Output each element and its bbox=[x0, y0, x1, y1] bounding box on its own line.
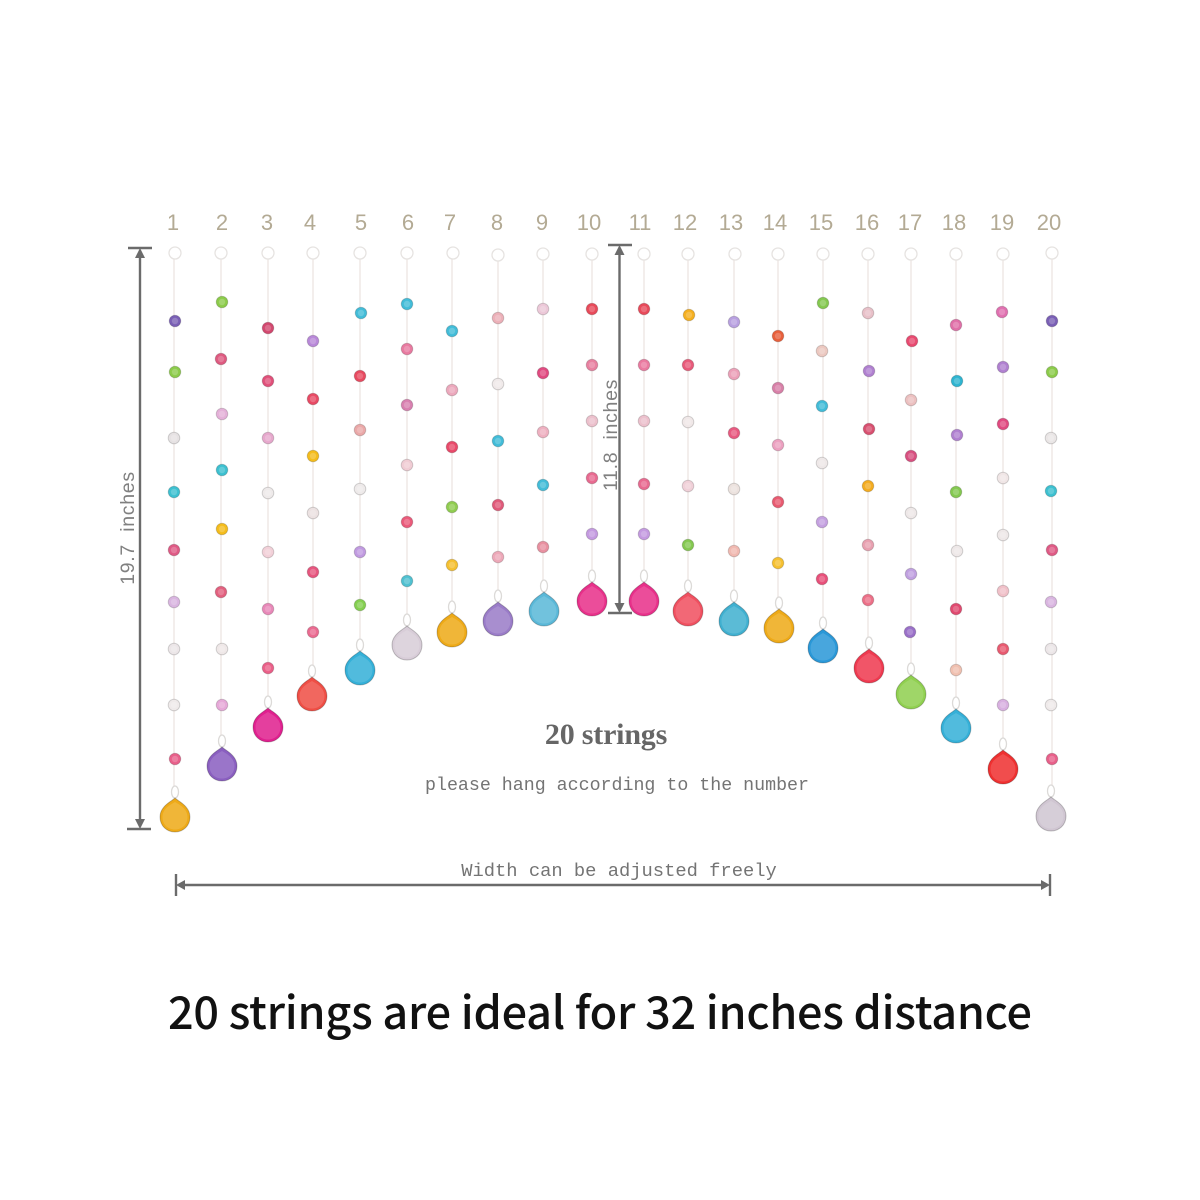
string 18 bbox=[941, 210, 971, 743]
drop: green bbox=[896, 663, 926, 709]
number 4: 4 bbox=[304, 210, 316, 235]
label: 19.7 inches: 19.7 inches bbox=[117, 471, 139, 585]
drop: red bbox=[854, 637, 884, 683]
number 3: 3 bbox=[261, 210, 273, 235]
drop: pink bbox=[577, 570, 607, 616]
number 17: 17 bbox=[898, 210, 922, 235]
arrow: width bbox=[176, 874, 1050, 896]
drop: coral red bbox=[673, 580, 703, 626]
number 14: 14 bbox=[763, 210, 787, 235]
label: width adjustable: Width can be adjusted freely bbox=[461, 860, 777, 882]
number 12: 12 bbox=[673, 210, 697, 235]
arrow: height 19.7 inches bbox=[127, 248, 152, 829]
string 19 bbox=[988, 210, 1018, 784]
drop: purple bbox=[483, 590, 513, 636]
number 9: 9 bbox=[536, 210, 548, 235]
drop: blue bbox=[941, 697, 971, 743]
caption: 20 strings are ideal for 32 inches distance bbox=[168, 977, 1032, 1042]
note: hang according to number: please hang according to the number bbox=[425, 776, 809, 796]
string 20 bbox=[1036, 210, 1066, 831]
number 5: 5 bbox=[355, 210, 367, 235]
number 8: 8 bbox=[491, 210, 503, 235]
number 15: 15 bbox=[809, 210, 833, 235]
number 18: 18 bbox=[942, 210, 966, 235]
string 4 bbox=[297, 210, 327, 711]
drop: magenta bbox=[253, 696, 283, 742]
heading: 20 strings: 20 strings bbox=[545, 718, 667, 751]
label: 11.8 inches: 11.8 inches bbox=[600, 379, 622, 491]
drop: blue bbox=[719, 590, 749, 636]
arrow: height 11.8 inches bbox=[608, 245, 632, 613]
string 14 bbox=[763, 210, 794, 643]
string 3 bbox=[253, 210, 283, 742]
string 10 bbox=[577, 210, 607, 616]
string 17 bbox=[896, 210, 926, 709]
string 5 bbox=[345, 210, 375, 685]
string 12 bbox=[673, 210, 703, 626]
string 9 bbox=[529, 210, 559, 626]
number 10: 10 bbox=[577, 210, 601, 235]
string 13 bbox=[719, 210, 749, 636]
drop: amber bbox=[160, 786, 190, 832]
drop: amber bbox=[764, 597, 794, 643]
number 6: 6 bbox=[402, 210, 414, 235]
string 15 bbox=[808, 210, 838, 663]
number 11: 11 bbox=[629, 210, 651, 235]
string 16 bbox=[854, 210, 884, 683]
drop: pink bbox=[629, 570, 659, 616]
number 1: 1 bbox=[167, 210, 179, 235]
drop: blue bbox=[345, 639, 375, 685]
drop: purple bbox=[207, 735, 237, 781]
drop: deep blue bbox=[808, 617, 838, 663]
drop: sky blue bbox=[529, 580, 559, 626]
number 2: 2 bbox=[216, 210, 228, 235]
string 2 bbox=[207, 210, 237, 781]
string 7 bbox=[437, 210, 467, 647]
string 6 bbox=[392, 210, 422, 660]
string 8 bbox=[483, 210, 513, 636]
string 11 bbox=[629, 210, 659, 616]
drop: amber bbox=[437, 601, 467, 647]
number 7: 7 bbox=[444, 210, 456, 235]
drop: lilac grey bbox=[1036, 785, 1066, 831]
number 20: 20 bbox=[1037, 210, 1061, 235]
drop: lilac grey bbox=[392, 614, 422, 660]
number 13: 13 bbox=[719, 210, 743, 235]
drop: bright red bbox=[988, 738, 1018, 784]
number 16: 16 bbox=[855, 210, 879, 235]
number 19: 19 bbox=[990, 210, 1014, 235]
drop: red bbox=[297, 665, 327, 711]
string 1 bbox=[160, 210, 190, 832]
